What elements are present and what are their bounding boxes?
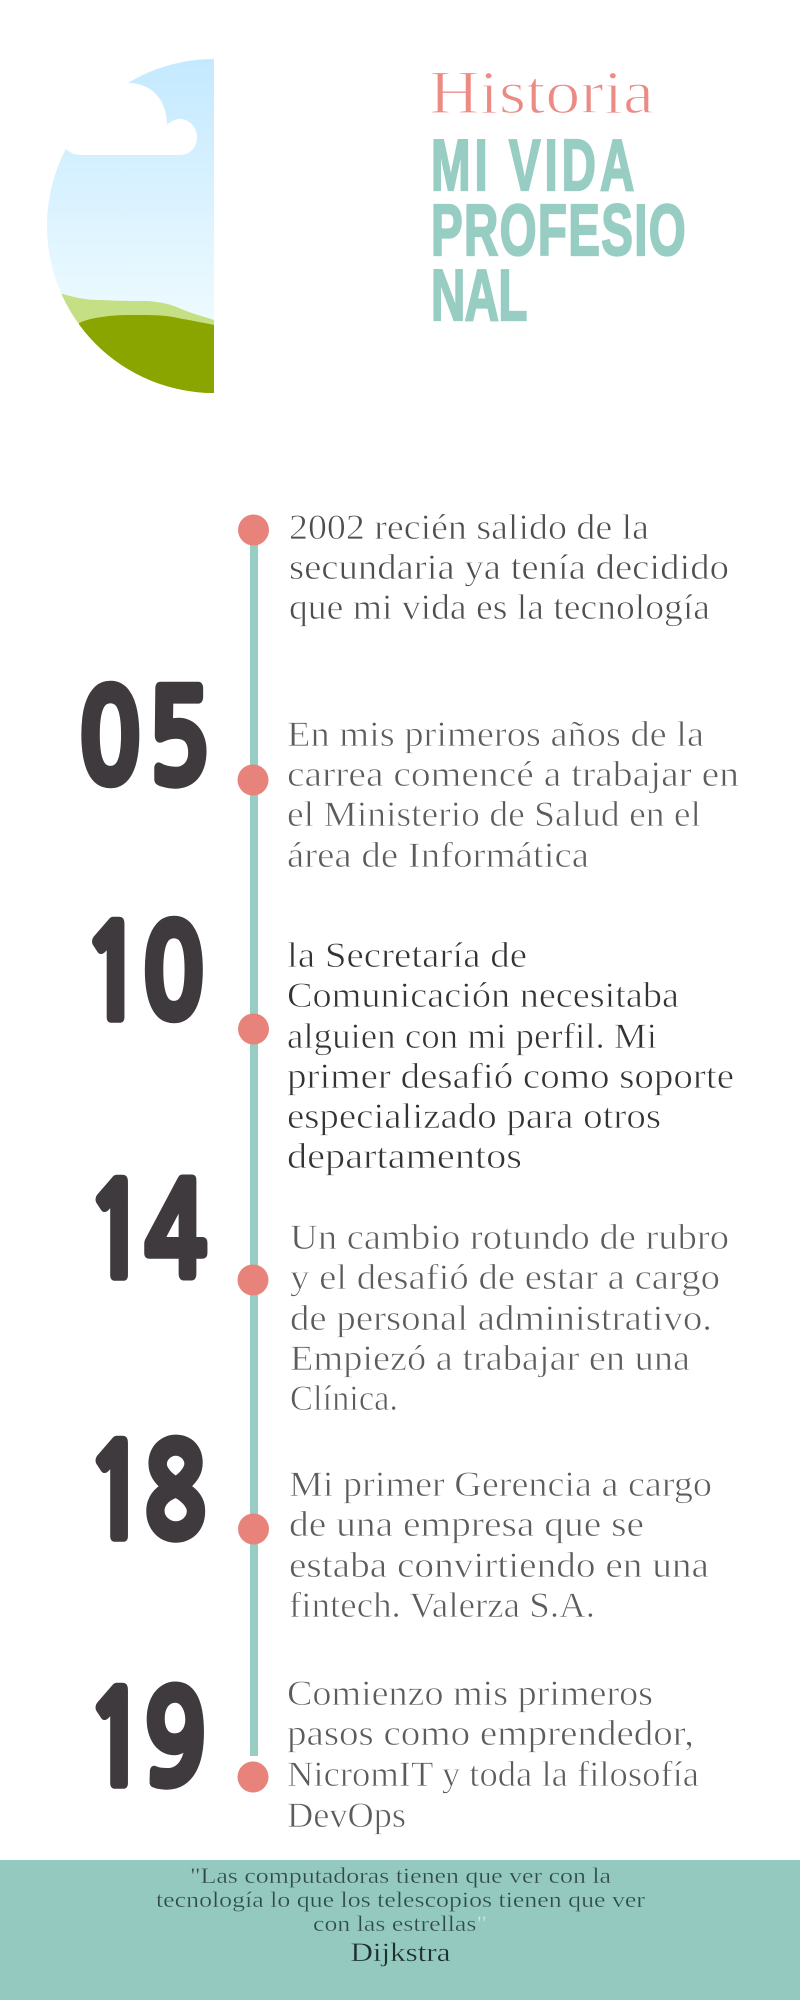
heading: Mi vida profesional: MI VIDA: [431, 125, 634, 205]
text block: 2005: carrea comencé a trabajar en: [287, 754, 739, 794]
text block: 2019: Comienzo mis primeros: [287, 1673, 653, 1713]
dark green hill: [79, 315, 214, 400]
cloud: [66, 83, 197, 155]
text block: 2014: Clínica.: [290, 1378, 398, 1418]
footer quote: tecnología lo que los telescopios tienen que ver: [156, 1887, 646, 1912]
text block: 2019: [287, 1673, 699, 1835]
text block: 2010: alguien con mi perfil. Mi: [287, 1016, 657, 1056]
heading: Mi vida profesional: [431, 125, 686, 335]
text block: 2005: En mis primeros años de la: [287, 714, 704, 754]
text block: 2010: primer desafió como soporte: [287, 1056, 734, 1096]
text block: 2002: 2002 recién salido de la: [289, 507, 649, 547]
sky: [47, 59, 214, 320]
text block: 2019: pasos como emprendedor,: [287, 1713, 694, 1753]
footer quote: con las estrellas ": [313, 1911, 487, 1936]
text block: 2010: la Secretaría de: [287, 935, 527, 975]
year 05: 05: [79, 677, 210, 803]
year 19: 19: [86, 1678, 206, 1804]
text block: 2002: que mi vida es la tecnología: [289, 587, 710, 627]
text block: 2018: estaba convirtiendo en una: [289, 1545, 709, 1585]
year 14: 14: [86, 1170, 207, 1296]
text block: 2010: especializado para otros: [287, 1096, 661, 1136]
text block: 2005: área de Informática: [287, 835, 589, 875]
light green hill: [61, 294, 214, 393]
text block: 2019: DevOps: [287, 1795, 406, 1835]
text block: 2018: de una empresa que se: [289, 1504, 644, 1544]
text block: 2002: [289, 507, 729, 627]
illustration: half-circle landscape: [47, 59, 214, 393]
year 10: 10: [82, 912, 205, 1038]
year 18: 18: [86, 1431, 206, 1557]
quote author: Dijkstra: [350, 1938, 451, 1967]
text block: 2005: [287, 714, 739, 875]
text block: 2014: [290, 1217, 729, 1418]
heading: Mi vida profesional: PROFESIO: [431, 190, 686, 270]
text block: 2014: Empiezó a trabajar en una: [290, 1338, 690, 1378]
text block: 2019: NicromIT y toda la filosofía: [287, 1754, 699, 1794]
heading: Mi vida profesional: NAL: [431, 255, 527, 335]
text block: 2014: Un cambio rotundo de rubro: [290, 1217, 729, 1257]
title: Historia: Historia: [429, 60, 654, 127]
timeline line: [250, 530, 258, 1756]
text block: 2018: [289, 1464, 712, 1625]
timeline dots: [238, 514, 269, 1792]
text block: 2018: fintech. Valerza S.A.: [289, 1585, 595, 1625]
footer band: [0, 1860, 800, 2000]
text block: 2014: y el desafió de estar a cargo: [290, 1257, 720, 1297]
footer quote: [156, 1863, 646, 1936]
text block: 2002: secundaria ya tenía decidido: [289, 547, 729, 587]
text block: 2014: de personal administrativo.: [290, 1298, 712, 1338]
text block: 2018: Mi primer Gerencia a cargo: [289, 1464, 712, 1504]
text block: 2005: el Ministerio de Salud en el: [287, 794, 701, 834]
text block: 2010: [287, 935, 734, 1176]
text block: 2010: departamentos: [287, 1136, 522, 1176]
text block: 2010: Comunicación necesitaba: [287, 975, 679, 1015]
footer quote: "Las computadoras tienen que ver con la: [190, 1863, 611, 1888]
